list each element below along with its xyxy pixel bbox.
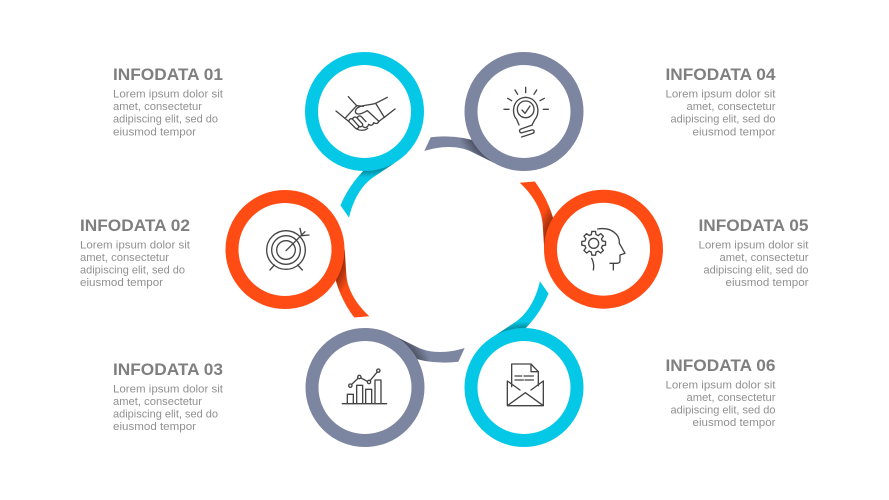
ribbon: grey bottom <box>395 336 465 363</box>
text block: INFODATA 03: adipiscing elit, sed do <box>113 408 218 420</box>
text block: INFODATA 04: eiusmod tempor <box>692 126 776 138</box>
ribbon: orange left <box>322 250 380 324</box>
ring: cyan 01 <box>312 58 418 164</box>
text block: INFODATA 04 <box>666 66 776 138</box>
text block: INFODATA 04: Lorem ipsum dolor sit <box>666 88 776 100</box>
text block: INFODATA 04: adipiscing elit, sed do <box>670 114 776 126</box>
text block: INFODATA 02: Lorem ipsum dolor sit <box>80 239 191 251</box>
text block: INFODATA 05: Lorem ipsum dolor sit <box>698 239 809 251</box>
text block: INFODATA 01 <box>113 66 224 138</box>
ring: orange 05 <box>550 196 656 302</box>
heading: INFODATA 03: INFODATA 03 <box>113 361 223 379</box>
ribbon: cyan top-left <box>337 150 394 224</box>
text block: INFODATA 02: eiusmod tempor <box>80 277 163 289</box>
text block: INFODATA 04: amet, consectetur <box>686 101 776 113</box>
icon: bar chart with trend <box>342 369 387 404</box>
text block: INFODATA 01: eiusmod tempor <box>113 126 196 138</box>
text block: INFODATA 06: amet, consectetur <box>686 392 776 404</box>
text block: INFODATA 03: amet, consectetur <box>113 396 202 408</box>
text block: INFODATA 05: eiusmod tempor <box>726 277 809 289</box>
heading: INFODATA 02: INFODATA 02 <box>80 217 190 235</box>
text block: INFODATA 01: Lorem ipsum dolor sit <box>113 88 224 100</box>
text block: INFODATA 03 <box>113 361 224 433</box>
icon: envelope with letter <box>507 364 543 406</box>
text block: INFODATA 03: Lorem ipsum dolor sit <box>113 383 224 395</box>
icon: head with gear <box>582 229 625 270</box>
icon: target with arrow <box>267 228 309 270</box>
text block: INFODATA 06: eiusmod tempor <box>692 417 776 429</box>
text block: INFODATA 05: amet, consectetur <box>720 252 809 264</box>
text block: INFODATA 02: amet, consectetur <box>80 252 169 264</box>
ring: cyan 06 <box>471 334 577 440</box>
text block: INFODATA 06: adipiscing elit, sed do <box>670 404 776 416</box>
icon: handshake <box>336 97 395 130</box>
text block: INFODATA 05 <box>698 217 809 289</box>
ribbon: grey top <box>424 136 494 163</box>
ring: orange 02 <box>232 196 338 302</box>
text block: INFODATA 06 <box>666 357 776 429</box>
ribbon: cyan bottom-right <box>495 275 552 349</box>
heading: INFODATA 05: INFODATA 05 <box>698 217 808 235</box>
heading: INFODATA 06: INFODATA 06 <box>666 357 776 375</box>
text block: INFODATA 06: Lorem ipsum dolor sit <box>666 379 776 391</box>
ring: grey 03 <box>312 334 418 440</box>
text block: INFODATA 05: adipiscing elit, sed do <box>704 264 808 276</box>
text block: INFODATA 03: eiusmod tempor <box>113 421 196 433</box>
heading: INFODATA 04: INFODATA 04 <box>666 66 776 84</box>
text block: INFODATA 02 <box>80 217 191 289</box>
ribbon: orange right <box>509 175 567 249</box>
ring: grey 04 <box>471 58 577 164</box>
icon: light bulb <box>504 87 548 137</box>
text block: INFODATA 01: adipiscing elit, sed do <box>113 114 218 126</box>
text block: INFODATA 01: amet, consectetur <box>113 101 202 113</box>
heading: INFODATA 01: INFODATA 01 <box>113 66 223 84</box>
text block: INFODATA 02: adipiscing elit, sed do <box>80 264 185 276</box>
